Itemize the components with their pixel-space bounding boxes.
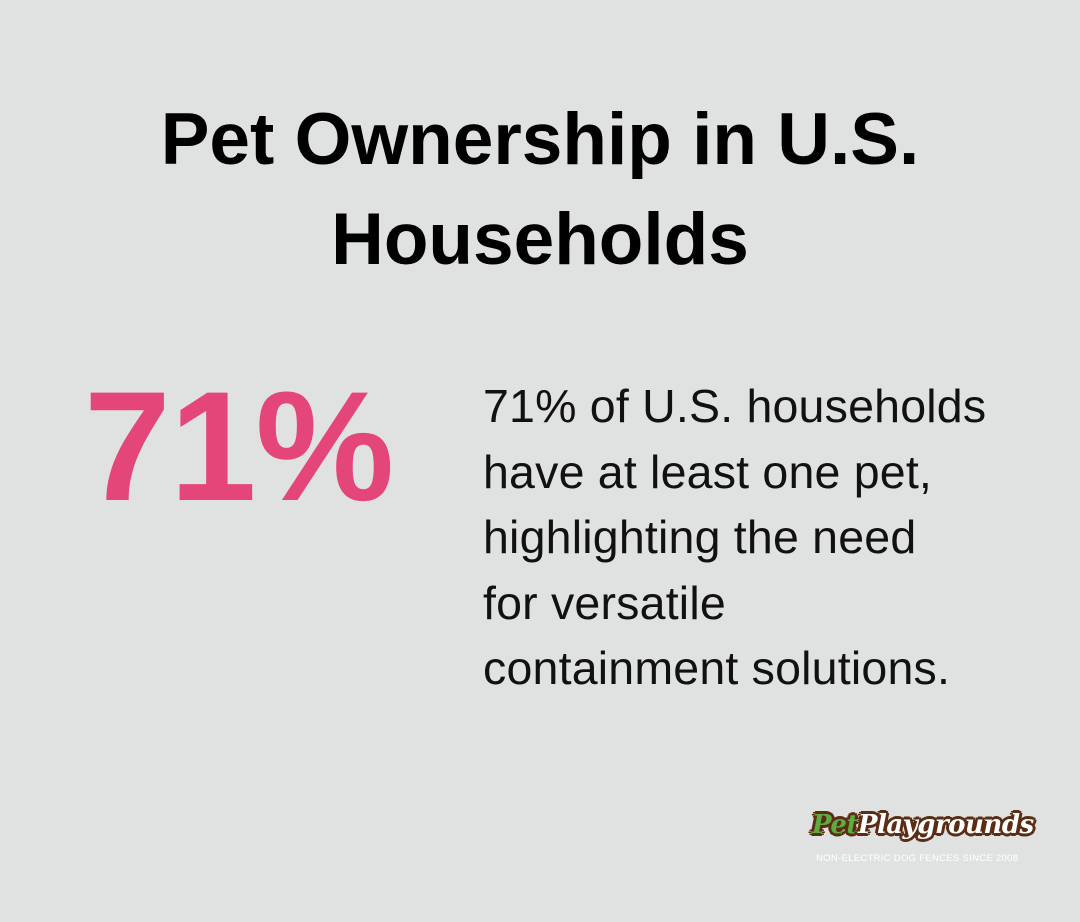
logo wordmark: PetPlaygrounds [812,810,1034,840]
description text: have at least one pet, [483,446,932,498]
title: Pet Ownership in U.S. [161,99,919,180]
title: Households [331,199,749,280]
logo: Pet Playgrounds [808,810,1037,864]
description text: highlighting the need [483,511,916,563]
description text: 71% of U.S. households [483,380,986,432]
title [161,99,919,280]
description text [483,380,986,694]
logo tagline: NON-ELECTRIC DOG FENCES SINCE 2008 [816,853,1018,864]
description text: containment solutions. [483,642,950,694]
description text: for versatile [483,576,726,628]
big stat: 71%: 71% [84,360,393,534]
